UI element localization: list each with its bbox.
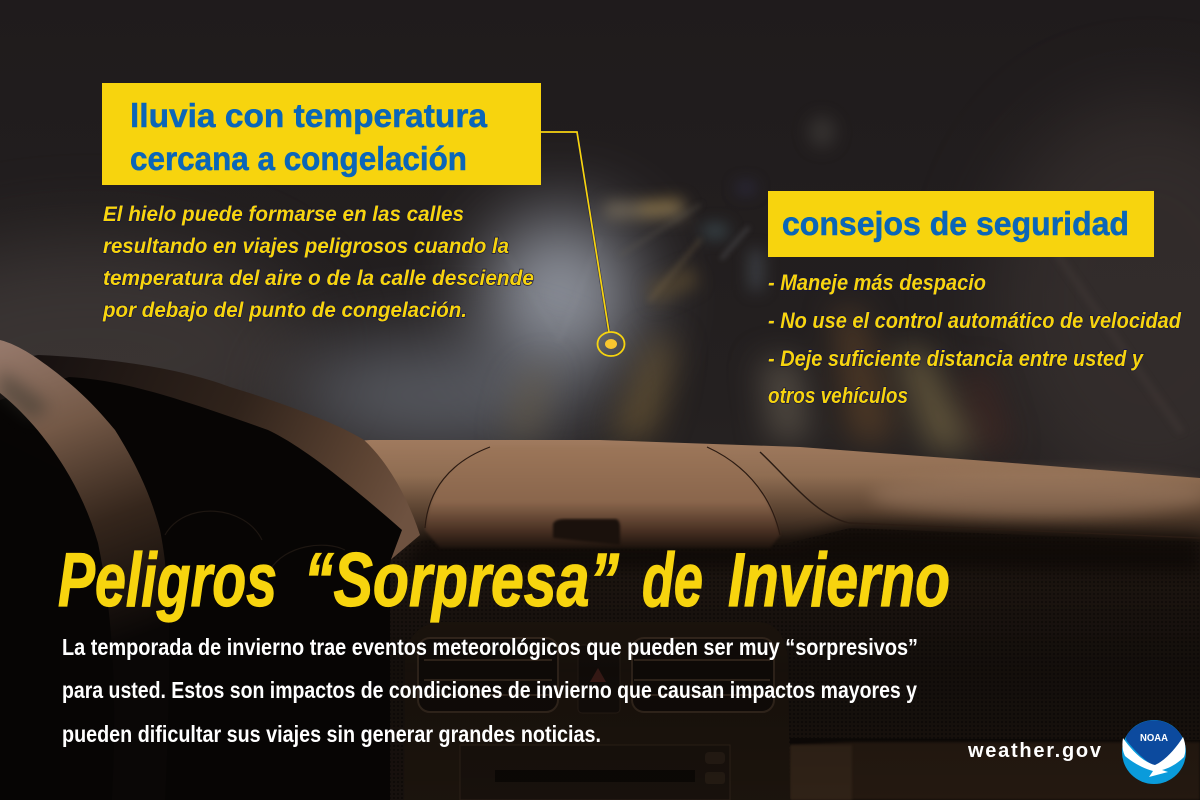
intro paragraph: para usted. Estos son impactos de condiciones de invierno que causan impactos mayores y	[62, 677, 917, 703]
safety tips list: - Maneje más despacio	[768, 270, 986, 295]
description text: temperatura del aire o de la calle desciende	[103, 267, 534, 290]
panel: consejos de seguridad	[768, 191, 1154, 257]
right vent	[632, 638, 774, 712]
callout box: lluvia con temperatura cercana a congelación: lluvia con temperatura	[130, 97, 488, 134]
textured lower dash	[380, 528, 1200, 800]
lower right panel	[790, 742, 1200, 800]
hazard switch	[578, 645, 620, 713]
callout box: lluvia con temperatura cercana a congelación: cercana a congelación	[130, 140, 467, 177]
pad seam	[760, 452, 1200, 538]
right haze	[990, 100, 1200, 500]
glovebox hump	[425, 447, 780, 548]
wheel inner green shade	[0, 370, 50, 420]
callout leader line and marker	[541, 132, 624, 356]
hood	[0, 355, 420, 562]
title: “Sorpresa”	[304, 538, 619, 623]
soft shadow under top pad	[400, 524, 1200, 572]
description text: El hielo puede formarse en las calles	[103, 203, 464, 226]
icon: NOAA logo	[1122, 720, 1186, 784]
steering wheel and instrument hood	[0, 340, 420, 800]
hump outline	[425, 447, 780, 535]
lower blue wash	[290, 345, 590, 445]
handle	[553, 519, 620, 545]
left vent	[418, 638, 558, 712]
intro paragraph: pueden dificultar sus viajes sin generar grandes noticias.	[62, 721, 601, 747]
dashboard	[0, 440, 1200, 800]
title: Invierno	[728, 538, 950, 623]
callout box: lluvia con temperatura cercana a congelación	[102, 83, 541, 185]
safety tips list: otros vehículos	[768, 383, 908, 408]
website label: weather.gov	[967, 740, 1102, 762]
safety tips list: - Deje suficiente distancia entre usted y	[768, 346, 1145, 371]
panel: consejos de seguridad: consejos de seguridad	[782, 205, 1129, 242]
radio	[460, 745, 730, 800]
instrument cluster	[0, 377, 402, 800]
wheel lower shade	[0, 440, 60, 800]
title	[58, 538, 950, 623]
gauges	[165, 511, 345, 570]
title: Peligros	[58, 538, 277, 623]
amber city lights band	[605, 116, 836, 306]
headlight blue-grey glow	[485, 215, 635, 375]
description text	[102, 203, 534, 322]
intro paragraph: La temporada de invierno trae eventos meteorológicos que pueden ser muy “sorpresivos”	[62, 634, 918, 660]
intro paragraph	[62, 634, 918, 747]
description text: resultando en viajes peligrosos cuando la	[103, 235, 509, 258]
safety tips list	[768, 270, 1182, 408]
top pad highlight	[870, 473, 1200, 517]
road reflections	[505, 310, 1010, 450]
icon: NOAA logo: NOAA	[1140, 733, 1168, 744]
center console	[404, 622, 790, 800]
wheel rim	[0, 340, 169, 800]
title: de	[642, 538, 703, 623]
light streaks	[495, 205, 1180, 430]
left haze	[0, 240, 310, 460]
description text: por debajo del punto de congelación.	[102, 299, 467, 322]
